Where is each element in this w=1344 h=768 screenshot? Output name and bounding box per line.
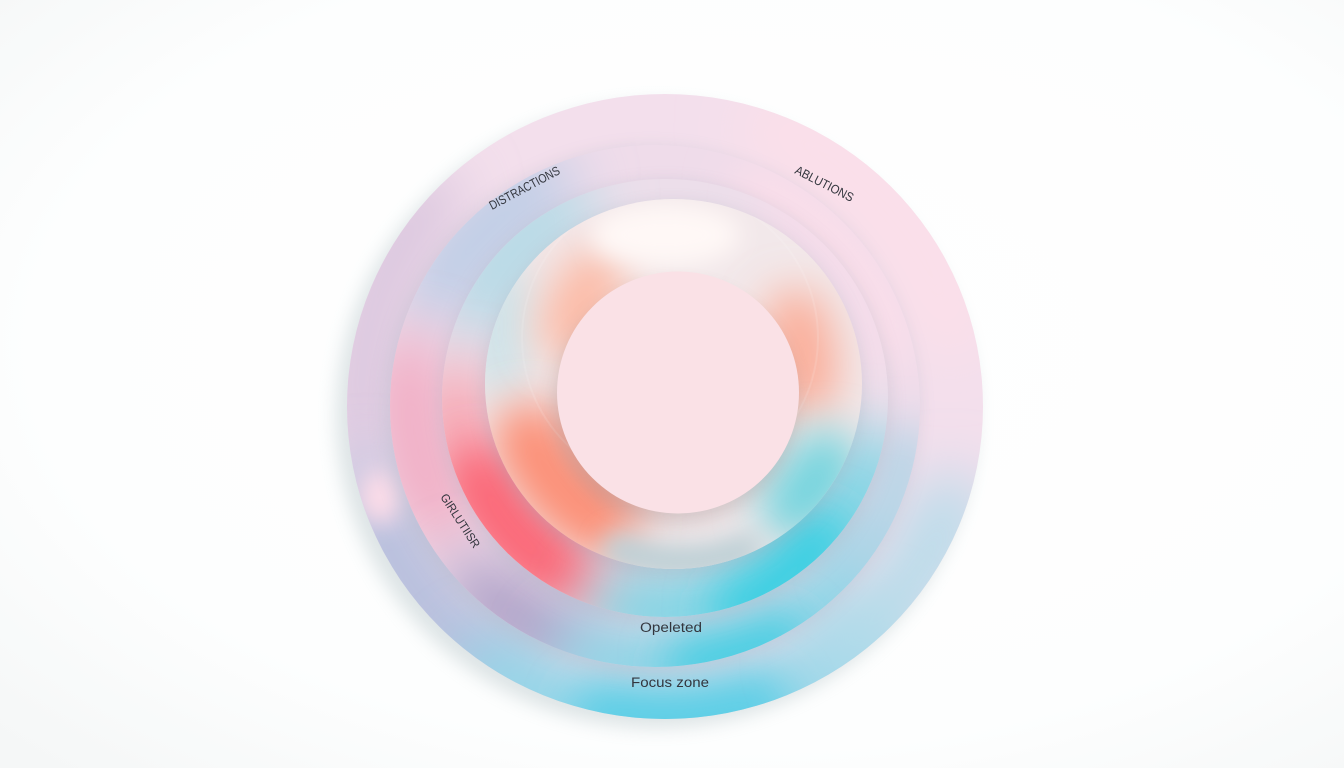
center circle shadow — [553, 284, 797, 524]
ring 4 — [480, 190, 870, 575]
label: focus zone: Focus zone — [631, 674, 709, 690]
ring 3 — [435, 170, 895, 625]
ring 4 shadow — [484, 205, 862, 575]
label: opeleted: Opeleted — [640, 620, 702, 635]
inner faint circle edge — [538, 320, 819, 448]
center circle — [557, 272, 799, 514]
ring 3 shadow — [441, 183, 889, 623]
label: distractions: DISTRACTIONS — [487, 164, 562, 213]
infographic: concentric focus zone diagram — [332, 94, 983, 732]
ring 1: focus zone — [340, 90, 990, 726]
ring 2 shadow — [385, 149, 917, 673]
outer ring shadow — [336, 104, 976, 728]
ring 2 — [385, 140, 925, 672]
label: circulation: GIRLUTIISR — [437, 491, 483, 551]
label: ablutions: ABLUTIONS — [793, 163, 856, 205]
